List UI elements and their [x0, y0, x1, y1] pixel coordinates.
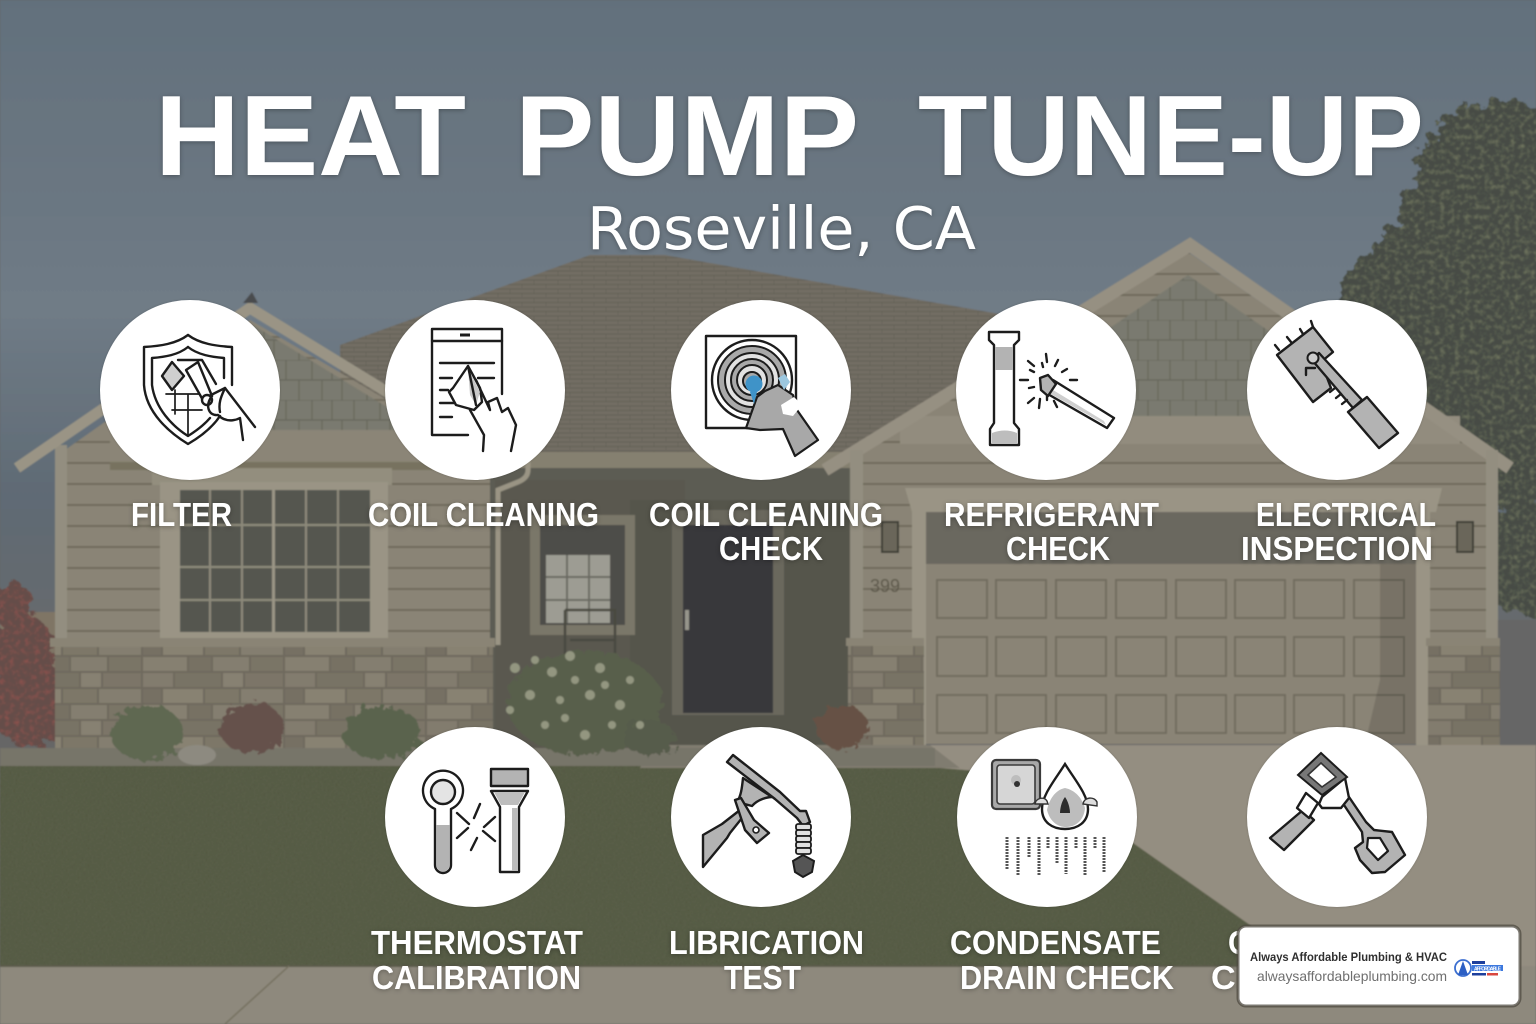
icon: coil with gloved hand: [706, 336, 818, 456]
icon: grease gun and scraper: [703, 755, 814, 877]
right stone bases: [848, 645, 924, 745]
label: drain check: DRAIN CHECK: [960, 960, 1174, 997]
wall lanterns and house number: [882, 522, 898, 552]
circle: [100, 300, 280, 480]
icon: drain pan, water drop and dripping lines: [992, 760, 1104, 875]
icon: electrical tester: [1275, 321, 1398, 448]
item: condensate drain check: [957, 727, 1137, 907]
front door: [672, 510, 784, 715]
label: coil cleaning check line 2: CHECK: [719, 531, 823, 568]
driveway and walkway: [930, 745, 1536, 967]
label: refrigerant check line 2: CHECK: [1006, 531, 1110, 568]
label: coil cleaning check: COIL CLEANING: [649, 497, 883, 534]
label: partly hidden line 2: CRANKCASE: [1211, 960, 1429, 997]
right gable wall: [850, 250, 1490, 645]
title: [155, 73, 1424, 200]
gutter: [498, 460, 528, 645]
label: filter: FILTER: [131, 497, 232, 534]
fence and red tree at left: [0, 612, 56, 712]
background: house photograph: 399: [870, 576, 900, 596]
circle: [385, 727, 565, 907]
label: refrigerant: REFRIGERANT: [944, 497, 1159, 534]
item: electrical inspection: [1247, 300, 1427, 480]
landscape rock: [178, 745, 216, 765]
lawn: [0, 765, 1536, 967]
mulch strip: [0, 748, 935, 766]
left window: [152, 468, 392, 485]
circle: [385, 300, 565, 480]
card panel: [1238, 926, 1520, 1006]
label: thermostat: THERMOSTAT: [371, 925, 583, 962]
icon: company logo: [1455, 960, 1503, 976]
circle: [1247, 300, 1427, 480]
attribution card: [1238, 926, 1520, 1006]
circle: [957, 727, 1137, 907]
entry window: [530, 515, 635, 635]
website: alwaysaffordableplumbing.com: [1257, 968, 1447, 984]
item: filter: [100, 300, 280, 480]
icon: company logo: AFFORDABLE: [1474, 966, 1502, 972]
item: coil cleaning check: [671, 300, 851, 480]
main hip roof: [340, 255, 1085, 475]
title: HEAT: [155, 73, 466, 200]
left gable trim: [17, 308, 400, 468]
title: PUMP: [515, 73, 859, 200]
icon: crossed pliers: [1270, 753, 1405, 873]
garage door: [926, 564, 1416, 744]
item: coil cleaning: [385, 300, 565, 480]
title: TUNE-UP: [918, 73, 1424, 200]
circle: [956, 300, 1136, 480]
circle: [671, 727, 851, 907]
circle: [671, 300, 851, 480]
label: coil cleaning: COIL CLEANING: [368, 497, 599, 534]
garage header: [905, 488, 1442, 512]
subtitle: Roseville, CA: [587, 194, 976, 263]
label: condensate: CONDENSATE: [950, 925, 1161, 962]
item: hidden label tool icon: [1247, 727, 1427, 907]
left stone base: [55, 645, 493, 750]
sky: [0, 0, 1536, 620]
icon: refrigerant gauge tube and sparking tool: [989, 332, 1114, 445]
company name: Always Affordable Plumbing & HVAC: [1250, 950, 1447, 964]
label: partly hidden line 1: COMPRESSOR: [1228, 925, 1446, 962]
labels row 2: [371, 925, 1446, 997]
label: libricat ion: LIBRICATION: [669, 925, 864, 962]
label: test: TEST: [724, 960, 801, 997]
label: electrical: ELECTRICAL: [1256, 497, 1436, 534]
white flower clusters: [506, 651, 644, 740]
item: thermostat calibration: [385, 727, 565, 907]
rocking chair: [565, 610, 615, 670]
label: calibration: CALIBRATION: [372, 960, 581, 997]
label: inspection: INSPECTION: [1241, 531, 1433, 568]
centre wall / porch recess: [480, 455, 880, 755]
labels row 1: [131, 497, 1436, 568]
left gable wall: [65, 320, 490, 645]
right gable trim: [825, 245, 1510, 470]
item: lubrication test: [671, 727, 851, 907]
icon: panel with cloth and hand: [432, 329, 516, 451]
sidewalk: [0, 966, 1536, 1024]
foreground shrubs: [111, 651, 868, 761]
icon: thermometer and calibration tool: [423, 769, 528, 873]
item: refrigerant check: [956, 300, 1136, 480]
tree at right: [1337, 100, 1536, 615]
circle: [1247, 727, 1427, 907]
icon: shield with filter and hand: [144, 335, 255, 444]
